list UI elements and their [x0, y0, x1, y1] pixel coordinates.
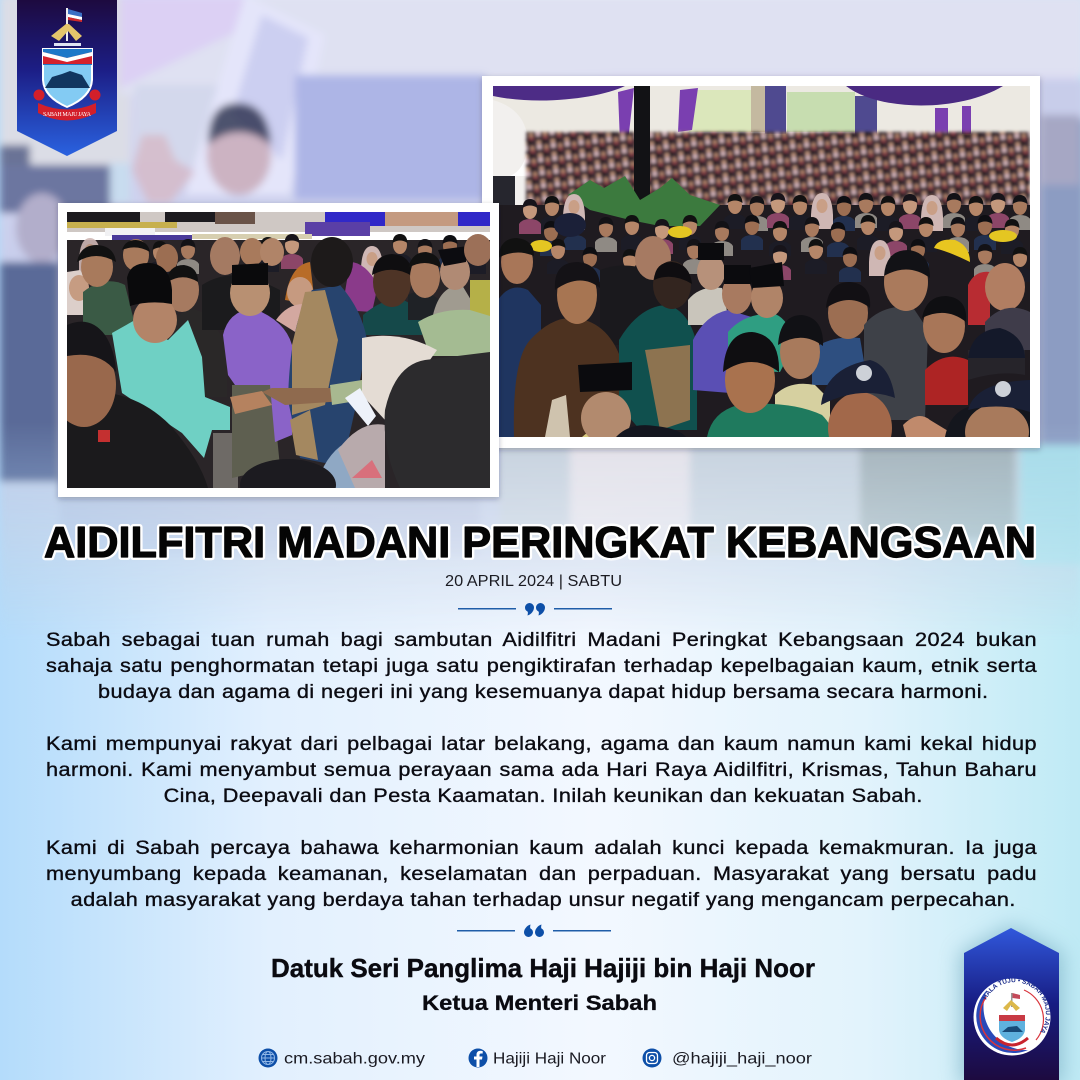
background: washed-out tent photo — [0, 0, 1080, 640]
man in mint — [728, 262, 786, 372]
body text — [46, 630, 1037, 911]
closing quote divider — [457, 924, 611, 937]
paragraph 1: Sabah sebagai tuan rumah bagi sambutan Aidilfitri Madani Peringkat Kebangsaan 2024 bukan — [46, 630, 1037, 651]
footer link: instagram: @hajiji_haji_noor — [672, 1050, 813, 1068]
woman and pink shirt — [276, 262, 378, 335]
background: right side tones — [1040, 119, 1080, 449]
green hijab — [418, 310, 490, 356]
man in black songkok — [578, 362, 686, 444]
paragraph 3: Kami di Sabah percaya bahawa keharmonian kaum adalah kunci kepada kemakmuran. Ia juga — [46, 838, 1037, 859]
signatory role: Ketua Menteri Sabah — [422, 992, 657, 1015]
title: AIDILFITRI MADANI PERINGKAT KEBANGSAAN — [44, 518, 1036, 567]
man in purple baju melayu — [223, 263, 292, 478]
guard in black — [52, 322, 208, 488]
black pillar — [634, 86, 650, 201]
paragraph 3: menyumbang kepada keamanan, keselamatan dan perpaduan. Masyarakat yang bersatu padu — [46, 864, 1037, 885]
man in purple — [693, 265, 755, 395]
footer link: website: cm.sabah.gov.my — [284, 1050, 425, 1068]
man in black centre — [202, 237, 315, 330]
paragraph 2 — [46, 734, 1037, 807]
hall roof and pillars — [493, 86, 1030, 205]
paragraph 3: adalah masyarakat yang berdaya tahan terhadap unsur negatif yang mengancam perpecahan. — [71, 890, 1016, 911]
icon: shield — [42, 48, 93, 108]
man in patterned shirt, from behind — [288, 237, 367, 463]
bald man in batik with red hijab — [968, 263, 1030, 350]
far crowd — [523, 129, 1030, 205]
man in brown shirt — [514, 262, 623, 437]
emblem mini crest — [996, 993, 1028, 1045]
opening quote divider — [458, 603, 612, 616]
man in teal batik — [619, 261, 697, 430]
footer link: facebook: Hajiji Haji Noor — [493, 1050, 607, 1068]
floor — [213, 433, 238, 488]
young man in green — [707, 332, 834, 437]
woman dress — [315, 424, 385, 488]
white hijab — [362, 336, 437, 420]
hand in front — [903, 416, 947, 437]
paragraph 2: harmoni. Kami menyambut semua perayaan sama ada Hari Raya Aidilfitri, Krismas, Tahun Baharu — [46, 760, 1037, 781]
paragraph 1 — [46, 630, 1037, 703]
front officer — [821, 360, 895, 437]
man in red and black — [922, 296, 968, 405]
man in grey shirt — [864, 250, 930, 420]
guests left group — [67, 239, 178, 335]
paragraph 2: Cina, Deepavali dan Pesta Kaamatan. Inilah keunikan dan kekuatan Sabah. — [164, 786, 923, 807]
icon: motto scroll SABAH MAJU JAYA — [34, 90, 100, 120]
foreground black cap — [385, 352, 490, 488]
footer link: instagram — [642, 1048, 813, 1068]
footer link: facebook — [468, 1048, 607, 1068]
man in beige — [775, 315, 830, 423]
icon: flag and staff — [51, 8, 82, 46]
foreground hair — [240, 459, 336, 511]
badge top: Sabah crest — [17, 0, 117, 156]
photo left: greeting in the crowd — [52, 203, 499, 511]
handshake arm — [230, 380, 362, 414]
front-right officer — [945, 380, 1030, 437]
dark-skinned man — [363, 254, 422, 335]
footer link: website — [258, 1048, 425, 1068]
white frame — [58, 203, 499, 497]
white frame — [482, 76, 1040, 448]
icon: motto scroll SABAH MAJU JAYA: SABAH MAJU JAYA — [43, 112, 92, 118]
man in blue batik — [812, 282, 870, 385]
paragraph 1: budaya dan agama di negeri ini yang kesemuanya dapat hidup bersama secara harmoni. — [98, 682, 988, 703]
paragraph 1: sahaja satu penghormatan tetapi juga satu pengiktirafan terhadap kepelbagaian kaum, etnik serta — [46, 656, 1037, 677]
man in teal baju melayu — [112, 263, 230, 458]
paragraph 3 — [46, 838, 1037, 911]
signatory name: Datuk Seri Panglima Haji Hajiji bin Haji Noor — [271, 953, 815, 983]
older man in grey baju — [688, 243, 730, 325]
bald man with glasses — [554, 213, 671, 284]
badge bottom: Hala Tuju emblem — [950, 918, 1072, 1080]
phone — [345, 388, 376, 426]
officer in cap, right — [968, 328, 1025, 380]
man in black behind teal — [168, 265, 199, 312]
background: dark left figures — [0, 145, 30, 175]
paragraph 2: Kami mempunyai rakyat dari pelbagai latar belakang, agama dan kaum namun kami kekal hidup — [46, 734, 1037, 755]
date line: 20 APRIL 2024 | SABTU — [445, 573, 622, 590]
emblem ring text: HALA TUJU • SABAH MAJU JAYA — [982, 978, 1050, 1033]
palm plants — [568, 176, 720, 226]
background: waving man — [132, 103, 271, 203]
background: lower hazy figures — [503, 449, 857, 496]
man in navy batik — [498, 238, 541, 437]
title: AIDILFITRI MADANI PERINGKAT KEBANGSAAN — [44, 518, 1036, 567]
photo right: crowd at event hall — [482, 76, 1040, 464]
men right side — [408, 234, 492, 320]
hall backdrop — [67, 212, 490, 240]
yellow caps — [530, 226, 1017, 262]
background guests — [67, 240, 490, 488]
mid crowd rows — [519, 193, 1031, 284]
